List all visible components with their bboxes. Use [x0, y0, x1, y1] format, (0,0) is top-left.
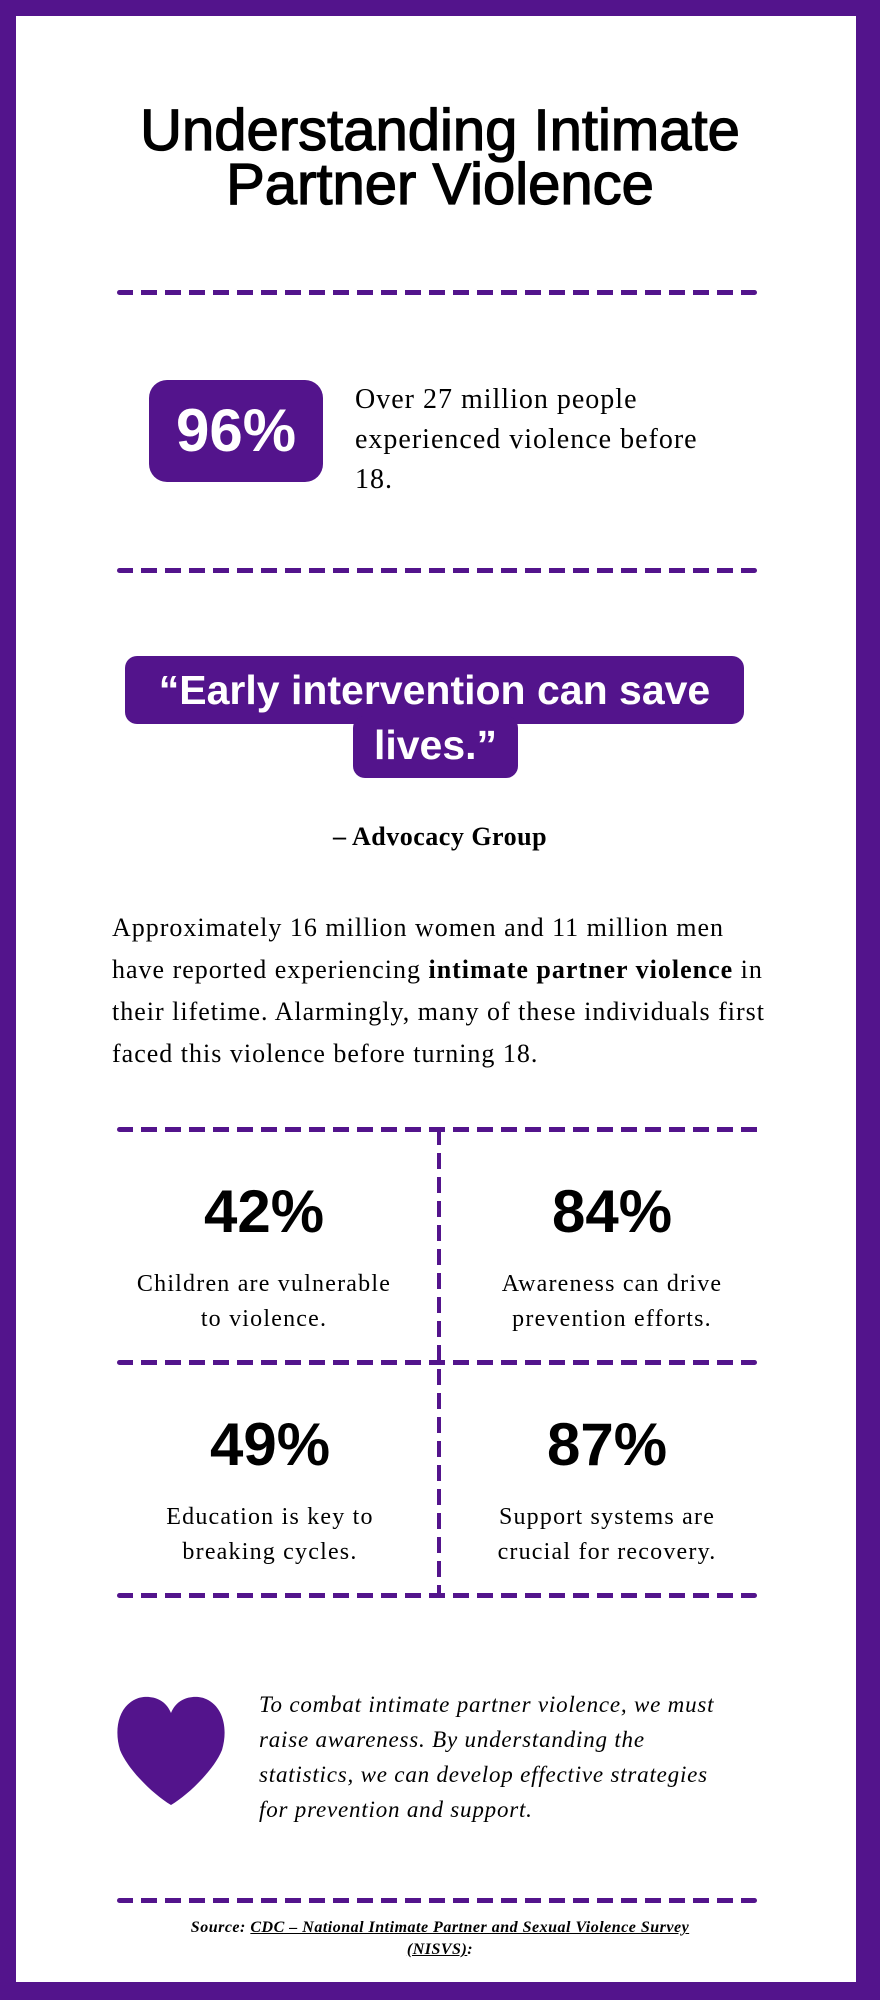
stat text: experienced violence before — [355, 424, 698, 455]
stat: 87%: 87% — [547, 1411, 667, 1478]
stat text: 18. — [355, 464, 393, 495]
stat: 49%: Education is key to — [166, 1504, 374, 1530]
stat: 84%: Awareness can drive — [502, 1271, 722, 1297]
source: Source: CDC – National Intimate Partner and Sexual Violence Survey — [191, 1919, 689, 1936]
stat text: Over 27 million people — [355, 384, 638, 415]
quote attribution: – Advocacy Group — [333, 822, 547, 851]
quote: lives.” — [374, 722, 497, 768]
closing text — [259, 1692, 714, 1822]
stat: 49% — [166, 1411, 374, 1565]
paragraph: their lifetime. Alarmingly, many of these individuals first — [112, 997, 765, 1026]
quote — [125, 656, 744, 778]
closing text: raise awareness. By understanding the — [259, 1727, 645, 1752]
paragraph: faced this violence before turning 18. — [112, 1039, 538, 1068]
title — [140, 98, 740, 217]
stat: 84%: 84% — [552, 1178, 672, 1245]
stat text — [355, 384, 698, 495]
stat: 84%: prevention efforts. — [512, 1306, 712, 1332]
paragraph: Approximately 16 million women and 11 million men — [112, 913, 724, 942]
icon: heart — [117, 1696, 225, 1805]
stat: 87%: crucial for recovery. — [498, 1539, 716, 1565]
stat: 84% — [502, 1178, 722, 1332]
stat: 87%: Support systems are — [499, 1504, 715, 1530]
source — [191, 1919, 690, 1958]
stat: 49%: breaking cycles. — [182, 1539, 358, 1565]
stat: 42% — [137, 1178, 391, 1332]
stat: 87% — [498, 1411, 716, 1565]
quote: “Early intervention can save — [159, 667, 710, 713]
stats grid — [117, 1127, 757, 1598]
paragraph: have reported experiencing intimate partner violence in — [112, 955, 763, 984]
paragraph — [112, 913, 765, 1068]
stat box: 96%: 96% — [176, 397, 296, 464]
title: Partner Violence — [226, 152, 654, 217]
stat: 42%: 42% — [204, 1178, 324, 1245]
closing text: statistics, we can develop effective strategies — [259, 1762, 708, 1787]
stat box: 96% — [149, 380, 323, 482]
closing text: To combat intimate partner violence, we must — [259, 1692, 714, 1717]
stat: 49%: 49% — [210, 1411, 330, 1478]
stat: 42%: Children are vulnerable — [137, 1271, 391, 1297]
title: Understanding Intimate — [140, 98, 740, 163]
source: (NISVS): — [407, 1941, 473, 1958]
closing text: for prevention and support. — [259, 1797, 533, 1822]
stat: 42%: to violence. — [201, 1306, 327, 1332]
